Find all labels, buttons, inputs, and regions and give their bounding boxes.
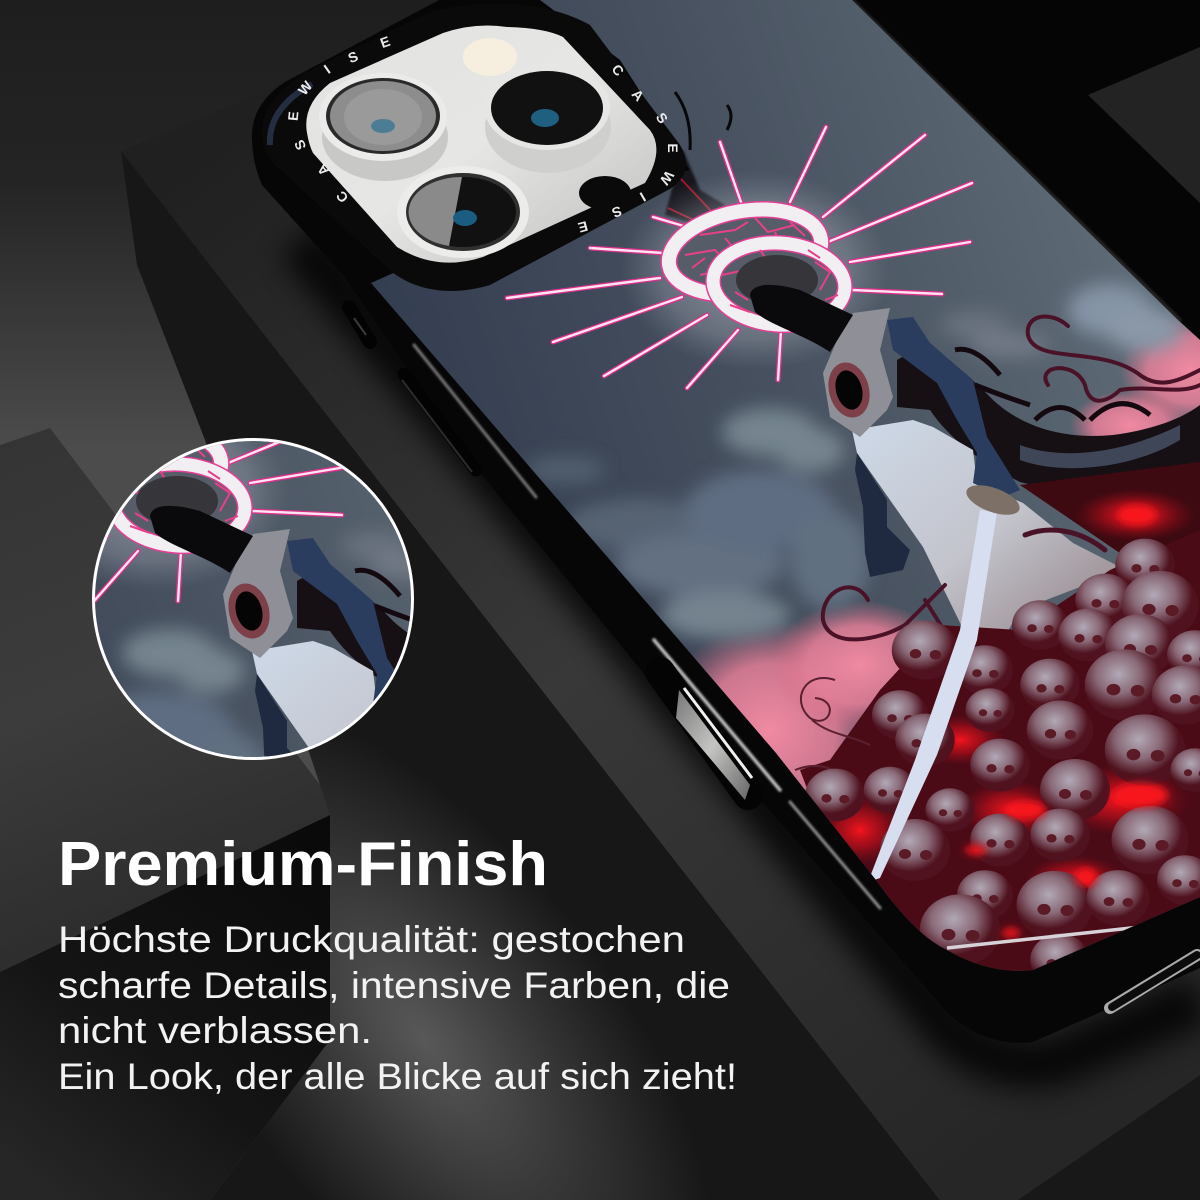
side button small bbox=[349, 307, 370, 342]
lens bottom bbox=[397, 166, 529, 258]
thin spiral tendril bbox=[794, 677, 870, 771]
brand text right: S bbox=[610, 203, 624, 221]
sensor bbox=[579, 176, 631, 210]
white robe bbox=[852, 420, 1120, 650]
heading: Premium-Finish bbox=[58, 830, 548, 899]
lens top right bbox=[484, 64, 611, 173]
brand text right: C bbox=[609, 61, 627, 79]
body text: Ein Look, der alle Blicke auf sich zieht! bbox=[58, 1056, 737, 1097]
brand text left: E bbox=[285, 111, 301, 121]
island glass bbox=[306, 25, 656, 263]
body text: scharfe Details, intensive Farben, die bbox=[58, 965, 730, 1006]
skulls bbox=[805, 539, 1200, 986]
halo rings bbox=[662, 198, 848, 330]
body text: Höchste Druckqualität: gestochen bbox=[58, 919, 685, 960]
brand text right bbox=[576, 61, 681, 236]
red glow patches bbox=[829, 717, 1184, 888]
right arm bbox=[887, 317, 1020, 497]
torso bbox=[823, 308, 893, 437]
brand text left bbox=[285, 33, 392, 206]
brand text left: E bbox=[378, 33, 392, 51]
camera island bbox=[262, 3, 686, 291]
side button long bbox=[402, 374, 476, 472]
lens top left bbox=[319, 73, 448, 181]
brand text right: I bbox=[637, 189, 649, 205]
charging port bbox=[1110, 955, 1197, 1008]
background block: lower right corner bbox=[1018, 1075, 1200, 1200]
background block: left step bbox=[0, 428, 330, 972]
phone case body bbox=[252, 0, 1200, 1043]
island frame bbox=[262, 3, 686, 291]
cape bbox=[897, 353, 1200, 491]
body text bbox=[58, 919, 737, 1097]
skull pile base bbox=[800, 530, 1200, 980]
phone shadow bbox=[300, 240, 1200, 1064]
background block: plinth side bbox=[121, 151, 940, 1200]
brand text left: S bbox=[291, 137, 309, 153]
brand text right: A bbox=[629, 86, 647, 104]
background: black upper right bbox=[852, 0, 1200, 345]
glow behind halo bbox=[620, 170, 890, 370]
neck tube bbox=[750, 285, 853, 352]
phone artwork bbox=[360, 0, 1200, 1000]
pink sky glow bbox=[693, 319, 1200, 807]
chest eye bbox=[822, 358, 876, 422]
flash bbox=[463, 38, 517, 76]
cape grey streak bbox=[1020, 425, 1180, 468]
brand text right: W bbox=[656, 168, 677, 189]
brand text left: W bbox=[295, 77, 316, 98]
head bbox=[736, 255, 818, 305]
halo rays bbox=[507, 127, 972, 388]
bone staff bbox=[947, 927, 1140, 948]
sky bbox=[360, 0, 1200, 1000]
brand text right: E bbox=[576, 218, 590, 236]
navy case band bbox=[270, 84, 312, 145]
case rim highlight bbox=[414, 0, 1180, 908]
sword bbox=[868, 479, 1023, 882]
brand text left: C bbox=[333, 188, 351, 206]
brand text left: A bbox=[314, 161, 332, 179]
brand text left: S bbox=[346, 48, 360, 66]
lace edge of cape bbox=[955, 349, 1150, 420]
bright ember spots bbox=[965, 505, 1168, 938]
red ember under cape bbox=[1020, 462, 1200, 552]
body text: nicht verblassen. bbox=[58, 1010, 372, 1051]
tendrils bbox=[823, 316, 1200, 640]
background block: top right bbox=[1088, 47, 1200, 203]
lower left arm bbox=[855, 453, 910, 577]
clouds bbox=[525, 284, 1183, 639]
brand text right: E bbox=[665, 143, 681, 153]
zoom inset bbox=[92, 438, 414, 760]
background block: lower dark step bbox=[0, 815, 330, 1200]
brand text right: S bbox=[653, 110, 671, 126]
brand text left: I bbox=[321, 61, 333, 77]
side button silver bbox=[660, 672, 752, 800]
hair behind island bbox=[665, 92, 731, 226]
